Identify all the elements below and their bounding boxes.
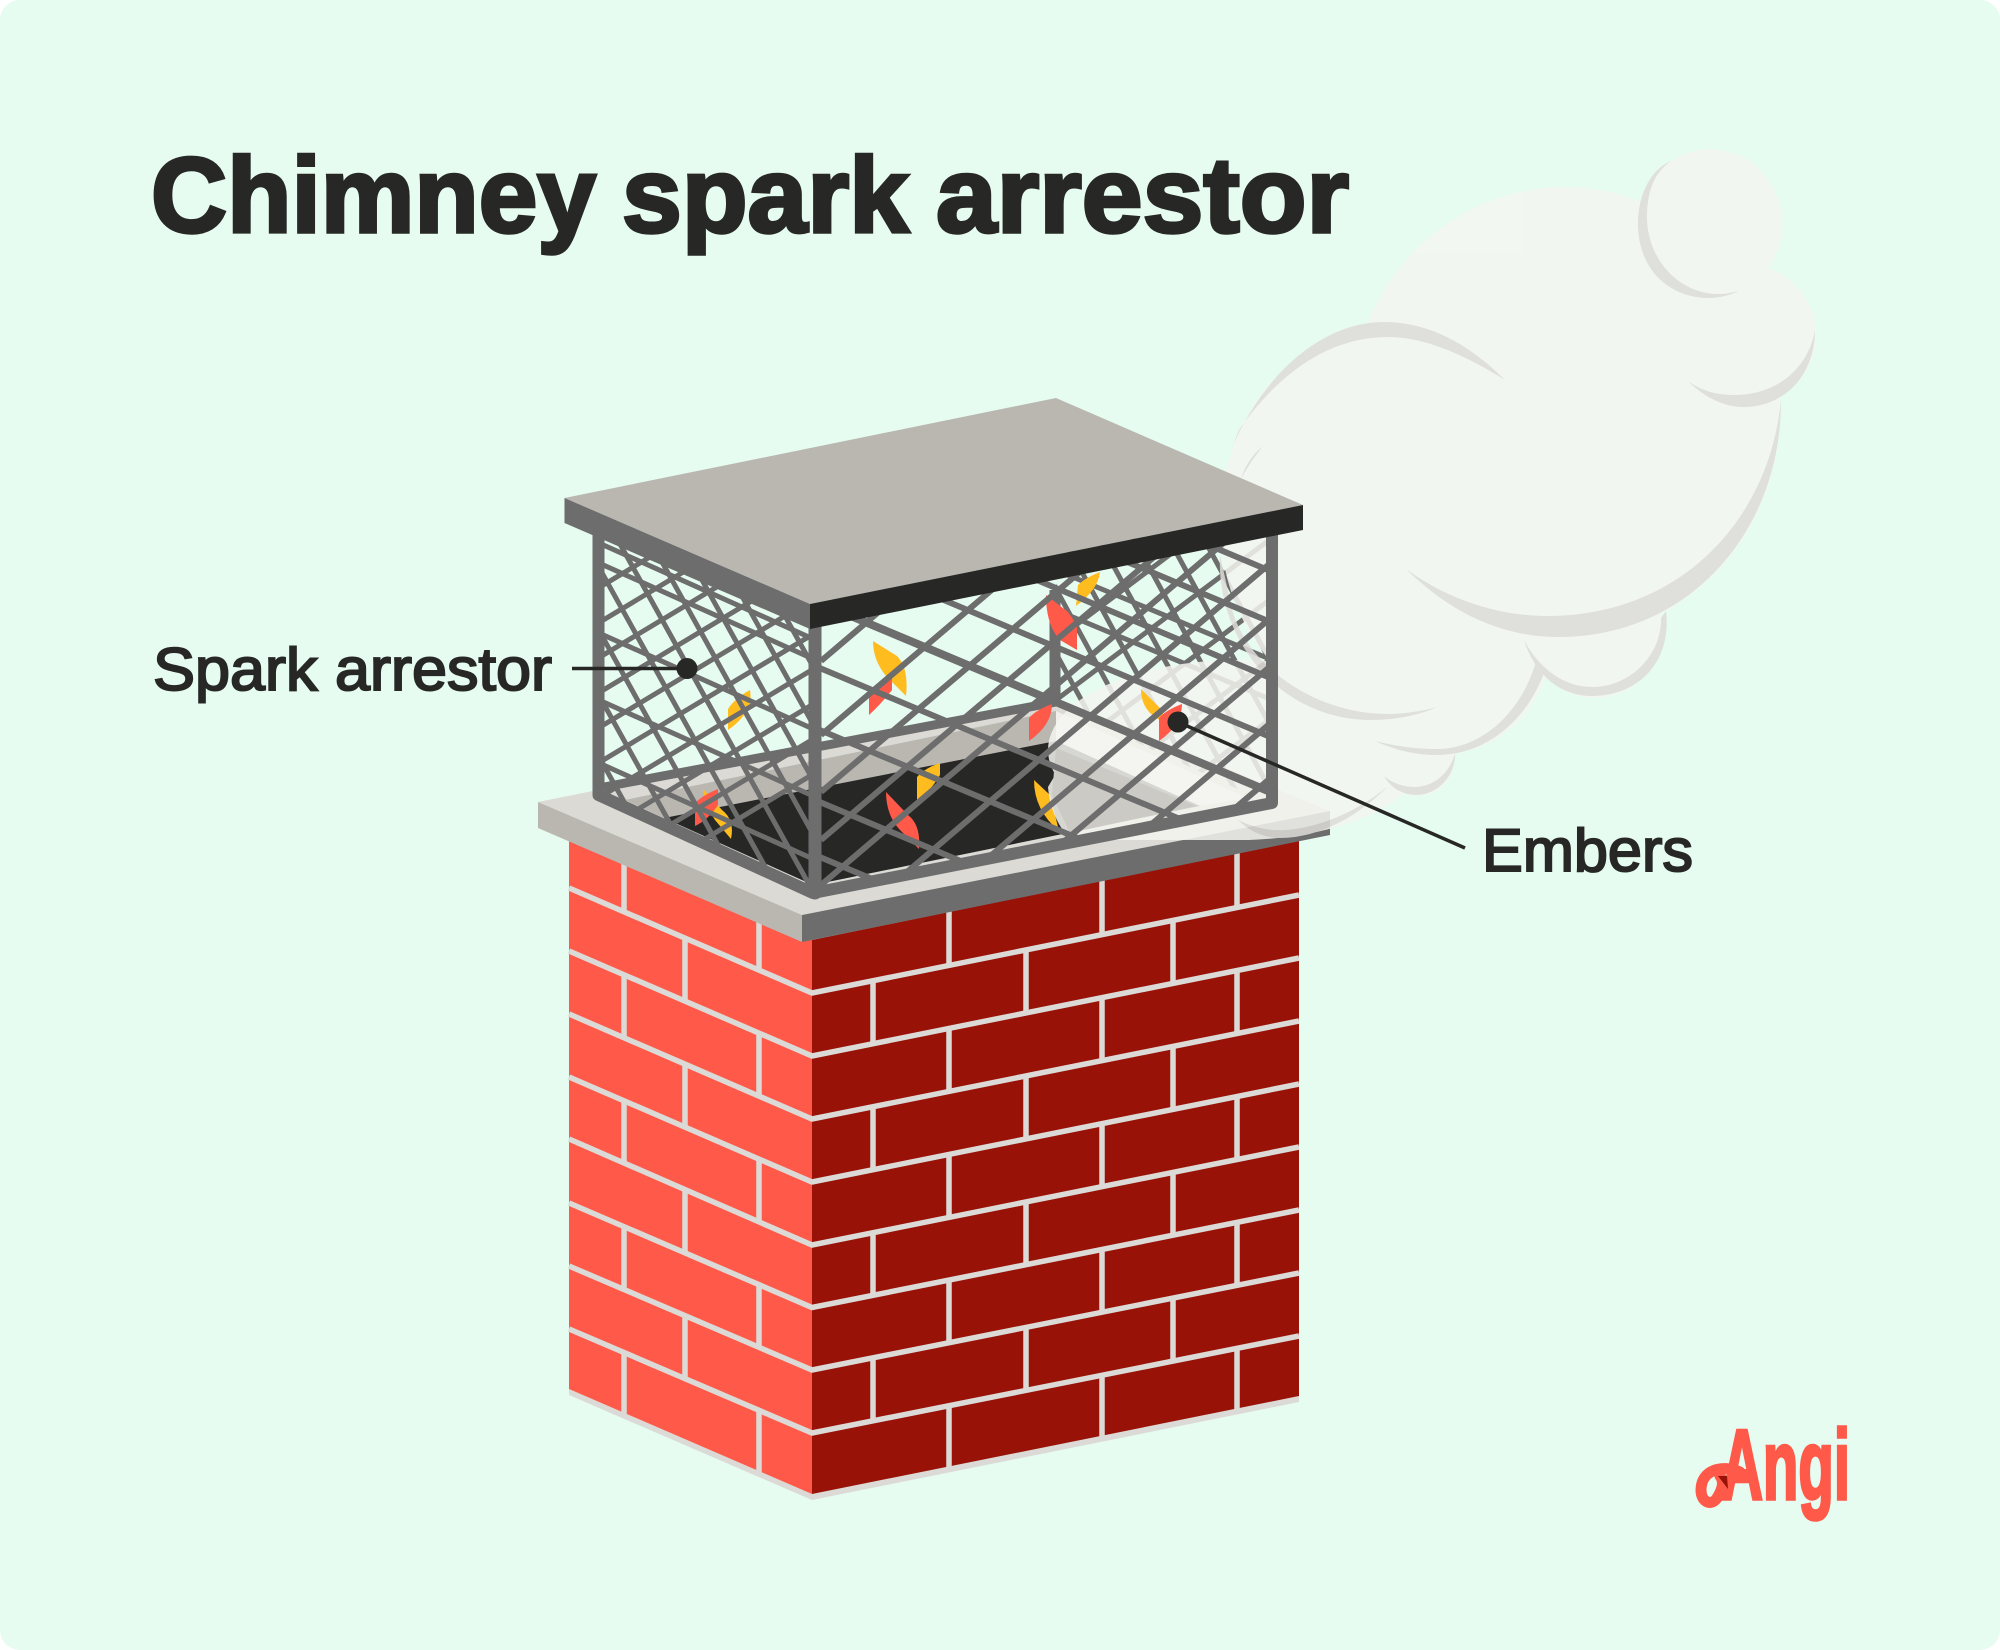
spark arrestor mesh: right face xyxy=(822,546,1266,886)
Angi logo: Angi xyxy=(1721,1409,1850,1520)
label: spark arrestor xyxy=(153,636,698,703)
embers xyxy=(695,572,1182,849)
flue floor seen through smoke xyxy=(1052,748,1196,833)
chimney cap roof xyxy=(564,398,1303,629)
concrete chimney cap xyxy=(538,698,1330,942)
ember behind smoke edge xyxy=(1034,780,1059,831)
label: embers: Embers xyxy=(1482,817,1693,884)
rear mesh panel xyxy=(1056,532,1266,789)
rear frame bars xyxy=(604,590,1056,787)
Angi logo xyxy=(1701,1409,1850,1520)
title xyxy=(151,135,1349,255)
smoke cloud xyxy=(1048,149,1816,840)
label: embers xyxy=(1168,712,1693,884)
spark arrestor mesh: left face xyxy=(604,542,808,884)
spark arrestor frame xyxy=(598,528,1272,893)
chimney brick stack xyxy=(569,835,1299,1500)
label: spark arrestor: Spark arrestor xyxy=(153,636,552,703)
flue opening xyxy=(625,711,1247,885)
title: arrestor xyxy=(936,135,1349,255)
title: spark xyxy=(622,135,909,255)
title: Chimney xyxy=(151,135,596,255)
